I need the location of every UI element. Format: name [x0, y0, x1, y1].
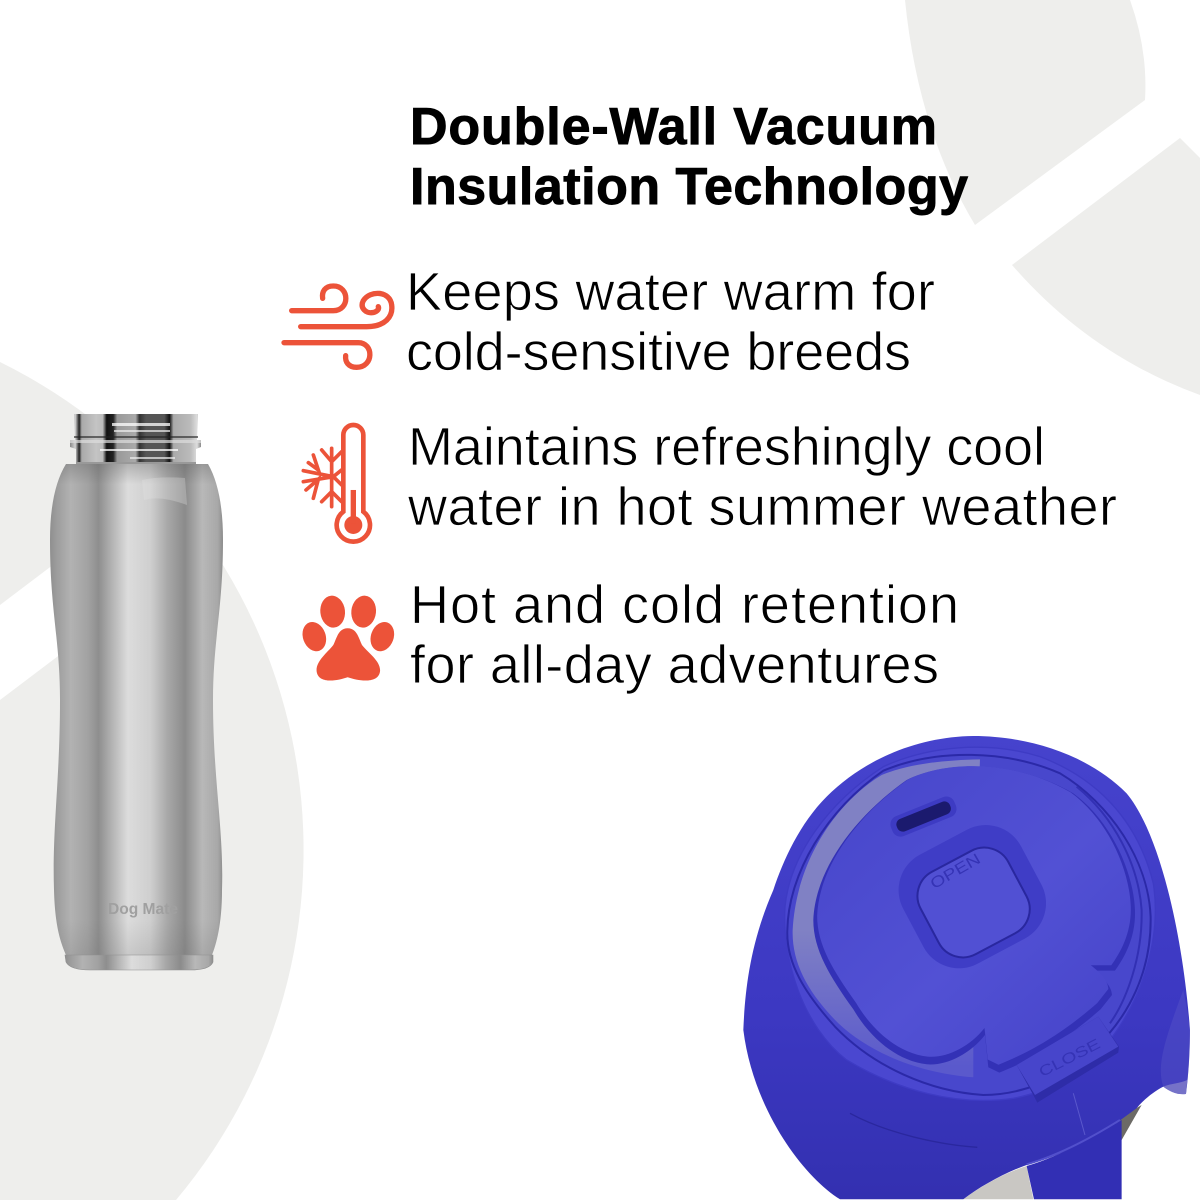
bottle vertical shading — [50, 464, 223, 970]
label: CLOSE: CLOSE — [1037, 1036, 1103, 1081]
sleeve side facet — [1161, 990, 1190, 1094]
flip lid base — [813, 766, 1135, 1073]
label: OPEN: OPEN — [927, 851, 984, 893]
icon: paw — [299, 594, 398, 681]
sleeve notch tip — [1163, 1080, 1187, 1094]
background shape: top-right arc segment — [905, 0, 1145, 225]
sleeve crease — [850, 1113, 977, 1147]
icon: wind — [284, 286, 392, 367]
background shape: left circle — [0, 362, 304, 1200]
benefit text: cool water: water in hot summer weather — [407, 477, 1117, 537]
bottle shoulder highlight — [142, 477, 187, 505]
bottle base ring — [65, 955, 213, 970]
benefit text: warm water: cold-sensitive breeds — [406, 322, 911, 382]
handle opening — [963, 1166, 1033, 1199]
blue bottle lid photo — [743, 736, 1190, 1199]
bottle body — [50, 464, 223, 970]
bottle logo: Dog Mate — [108, 901, 178, 918]
handle strap — [1027, 1120, 1122, 1199]
background shape: right arc segment — [1012, 138, 1200, 395]
benefit text: retention: Hot and cold retention — [410, 575, 959, 635]
benefit text: cool water — [407, 417, 1117, 537]
vent slot — [888, 794, 959, 839]
steel visible behind handle — [1117, 1105, 1142, 1140]
push button — [908, 838, 1039, 967]
background shape: diagonal white cut — [0, 378, 300, 700]
closing tab — [1017, 1017, 1119, 1103]
benefit text: cool water: Maintains refreshingly cool — [408, 417, 1045, 477]
title — [410, 98, 968, 216]
inner ring groove — [1077, 787, 1142, 1023]
icon: thermometer with snowflake — [303, 425, 370, 542]
bottle neck — [70, 414, 201, 467]
benefit text: retention: for all-day adventures — [410, 635, 939, 695]
benefit text: retention — [410, 575, 959, 695]
button surround — [885, 811, 1060, 982]
gray inner well — [793, 759, 980, 1077]
title: Double-Wall Vacuum — [410, 98, 937, 156]
rim — [785, 747, 1155, 1100]
silicone sleeve — [743, 736, 1190, 1199]
rim groove and inner ring — [787, 755, 1151, 1095]
sleeve seam — [1073, 1093, 1085, 1135]
flip lid top surface — [817, 766, 1131, 1065]
title: Insulation Technology — [410, 158, 968, 216]
benefit text: warm water — [406, 262, 935, 382]
sleeve lower lip — [1027, 1120, 1120, 1164]
benefit text: warm water: Keeps water warm for — [406, 262, 935, 322]
steel bottle — [50, 414, 223, 970]
